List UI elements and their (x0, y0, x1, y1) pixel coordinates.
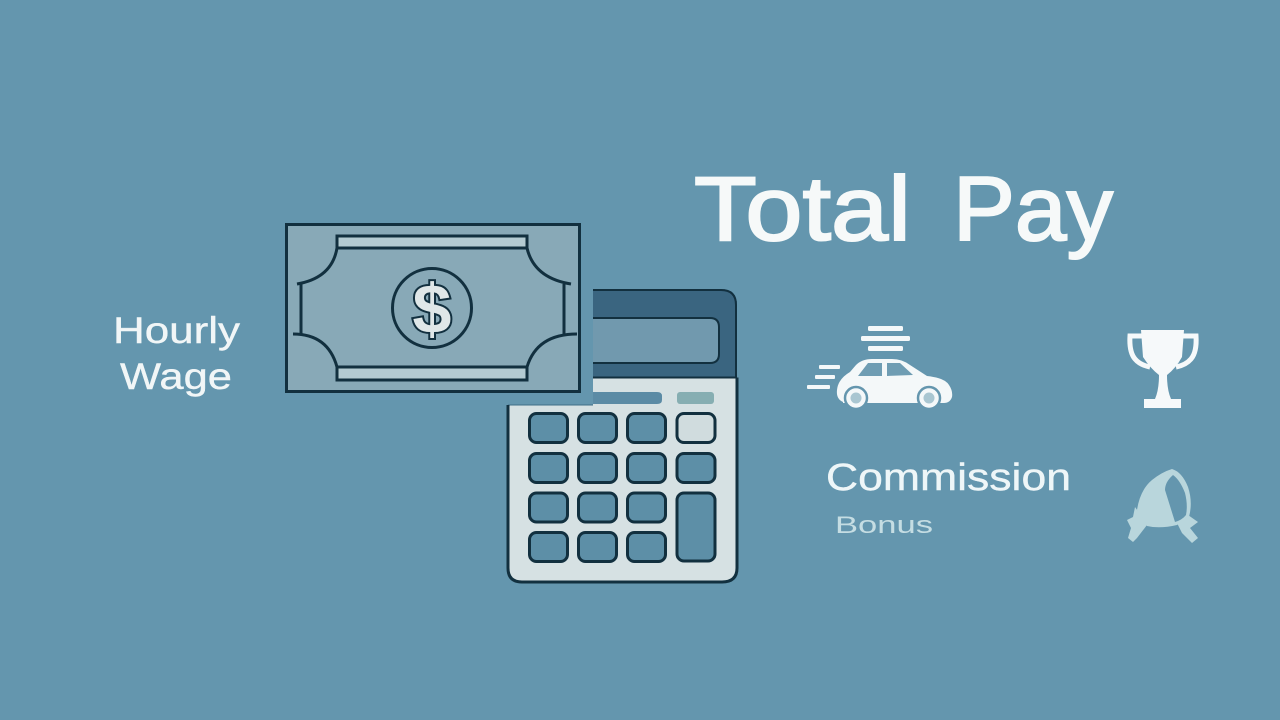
trophy base (1144, 399, 1181, 408)
label: bonus: Bonus (835, 512, 933, 539)
title: Pay (953, 159, 1114, 260)
bill top and bottom strips (337, 236, 527, 380)
car wheels (845, 387, 940, 409)
icon: calculator (507, 289, 737, 583)
label: hourly wage (113, 310, 241, 397)
icon: car (807, 326, 952, 409)
icon: ribbon (1127, 469, 1198, 543)
label: commission: Commission (826, 457, 1071, 499)
calculator screen (593, 318, 719, 363)
ribbon tails (1127, 507, 1198, 543)
trophy cup and stem (1141, 330, 1184, 399)
calculator keys (530, 414, 715, 562)
title: Total (694, 159, 911, 260)
motion lines above (861, 326, 910, 351)
calculator top housing (593, 289, 737, 378)
car windows (858, 363, 913, 376)
label: hourly wage: Wage (120, 356, 232, 397)
calculator body (507, 376, 737, 583)
label: hourly wage: Hourly (113, 310, 241, 351)
calculator display strips (593, 392, 714, 404)
dollar medallion: $ (413, 270, 451, 348)
dollar medallion (392, 268, 472, 348)
car body (837, 359, 952, 403)
speed lines (807, 365, 840, 389)
trophy handles (1130, 336, 1150, 367)
ribbon loop (1137, 469, 1191, 527)
icon: dollar bill (286, 224, 580, 392)
bill ornament (293, 248, 577, 367)
icon: trophy (1130, 330, 1196, 408)
title (694, 159, 1114, 260)
bill outline (286, 224, 580, 392)
